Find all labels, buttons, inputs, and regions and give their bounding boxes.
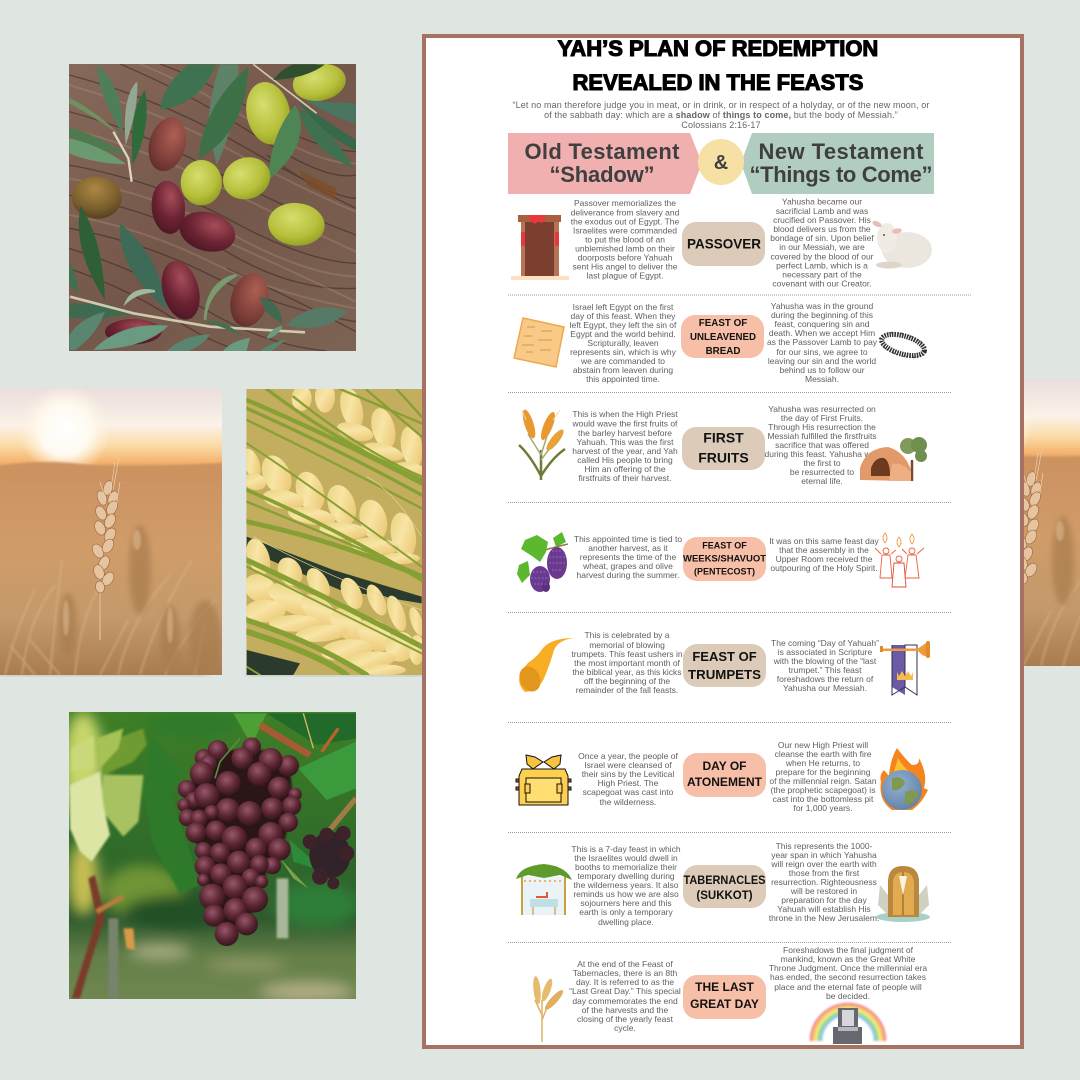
label: feast of trumpets bbox=[683, 644, 766, 687]
right text: Yahuah will establish His bbox=[777, 904, 871, 914]
left text: represents sin, which is why bbox=[570, 347, 677, 357]
right text: necessary part of the bbox=[782, 269, 862, 279]
divider lines bbox=[508, 295, 972, 942]
right text: leaving our sin and the world bbox=[768, 356, 876, 366]
label: the last great day: THE LAST bbox=[695, 980, 754, 994]
row: passover bbox=[511, 196, 932, 288]
left text: wheat, grapes and olive bbox=[582, 561, 673, 571]
icon: blood-marked door bbox=[511, 215, 569, 280]
row: the last great day bbox=[532, 945, 927, 1044]
label: day of atonement: DAY OF bbox=[702, 759, 747, 773]
row: day of atonement bbox=[516, 740, 928, 813]
right text: blood delivers us from the bbox=[773, 224, 871, 234]
right text: cast into the bottomless pit bbox=[773, 794, 874, 804]
label: tabernacles bbox=[683, 865, 766, 908]
left text: the Israelites would dwell in bbox=[574, 853, 678, 863]
label: the last great day bbox=[683, 975, 766, 1019]
left text: left Egypt, they left the sin of bbox=[570, 320, 677, 330]
right text: eternal life. bbox=[801, 476, 843, 486]
label: feast of unleavened bread: UNLEAVENED bbox=[690, 332, 756, 343]
left text: day. It is referred to as the bbox=[576, 977, 674, 987]
right text: Yahusha our Messiah. bbox=[783, 683, 867, 693]
left text: sojourners here and this bbox=[580, 898, 672, 908]
right text: cleanse the earth with fire bbox=[775, 749, 872, 759]
right text: outpouring of the Holy Spirit. bbox=[770, 563, 878, 573]
right text: prepare for the beginning bbox=[776, 767, 871, 777]
left text: to put the blood of an bbox=[585, 234, 665, 244]
right text: year span in which Yahusha bbox=[771, 850, 877, 860]
title: YAH’S PLAN OF REDEMPTION bbox=[558, 36, 878, 61]
scripture quote: “Let no man therefore judge you in meat, or in drink, or in respect of a holyday, or of the new moon, or bbox=[512, 100, 930, 110]
row: feast of unleavened bread bbox=[514, 301, 929, 384]
left text: Yahuah. This was the first bbox=[576, 437, 674, 447]
right text: feast, conquering sin and bbox=[775, 319, 870, 329]
icon: crown of thorns bbox=[877, 328, 929, 362]
label: feast of unleavened bread: BREAD bbox=[706, 346, 740, 357]
left text: remainder of the fall feasts. bbox=[576, 685, 678, 695]
left text: temporary dwelling during bbox=[577, 871, 675, 881]
icon: shofar bbox=[515, 638, 574, 695]
left text: earth is only a temporary bbox=[579, 907, 674, 917]
lower leaves bbox=[69, 206, 167, 350]
label: tabernacles: TABERNACLES bbox=[684, 875, 766, 887]
photo: wheat at sunset bbox=[0, 384, 222, 680]
right text: for 1,000 years. bbox=[793, 803, 853, 813]
right text: covered by the blood of our bbox=[770, 251, 874, 261]
banner: old and new testament bbox=[508, 133, 934, 194]
left text: This is when the High Priest bbox=[572, 409, 678, 419]
label: feast of weeks bbox=[683, 537, 767, 581]
top olives bbox=[292, 64, 346, 101]
banner: old testament shadow: Old Testament bbox=[524, 139, 680, 164]
banner: old testament shadow: “Shadow” bbox=[550, 162, 654, 187]
scripture quote: Colossians 2:16-17 bbox=[681, 120, 761, 130]
photo: grape cluster on vine bbox=[63, 712, 360, 1002]
title bbox=[558, 36, 878, 95]
icon: sukkah booth bbox=[516, 864, 572, 915]
label: first fruits: FRUITS bbox=[698, 450, 749, 466]
right text: during the beginning of this bbox=[771, 310, 873, 320]
right text: throne in the New Jerusalem. bbox=[769, 913, 879, 923]
icon: matzah bbox=[514, 318, 564, 367]
left text: dwelling place. bbox=[598, 917, 654, 927]
photo: wheat at sunset, right edge bbox=[823, 375, 1080, 671]
right text: behind us to follow our bbox=[779, 365, 865, 375]
label: the last great day: GREAT DAY bbox=[690, 997, 759, 1011]
left text: harvest of the year, and Yah bbox=[572, 446, 678, 456]
left text: the biblical year, as this kicks bbox=[572, 667, 682, 677]
banner: new testament things to come: New Testament bbox=[758, 139, 924, 164]
right text: the day of First Fruits. bbox=[781, 413, 863, 423]
label: feast of trumpets: TRUMPETS bbox=[688, 667, 761, 682]
left text: called His people to bring bbox=[577, 455, 673, 465]
left text: Tabernacles, there is an 8th bbox=[573, 968, 677, 978]
right text: those from the first bbox=[789, 868, 860, 878]
right text: It was on this same feast day bbox=[769, 536, 880, 546]
right text: during this feast. Yahusha was bbox=[765, 449, 879, 459]
left text: deliverance from slavery and bbox=[571, 207, 680, 217]
banner: old testament shadow bbox=[508, 133, 702, 194]
left text: trumpets. This feast ushers in bbox=[571, 649, 683, 659]
icon: disciples with flames bbox=[875, 533, 924, 587]
banner: new testament things to come: “Things to Come” bbox=[750, 162, 932, 187]
photo: golden barley close-up bbox=[239, 381, 428, 676]
right text: for our sins, we agree to bbox=[776, 347, 868, 357]
right text: perfect Lamb, which is a bbox=[776, 260, 868, 270]
left text: their sins by the Levitical bbox=[582, 769, 674, 779]
left text: the wilderness. bbox=[600, 797, 656, 807]
label: day of atonement: ATONEMENT bbox=[687, 775, 763, 789]
right text: Throne Judgment. Once the millennial era bbox=[769, 963, 927, 973]
left text: reminds us how we are also bbox=[573, 889, 679, 899]
left text: doorposts before Yahuah bbox=[578, 252, 673, 262]
left text: abstain from leaven during bbox=[573, 365, 673, 375]
label: feast of weeks: (PENTECOST) bbox=[694, 566, 755, 576]
left text: This appointed time is tied to bbox=[574, 534, 682, 544]
right text: Through His resurrection the bbox=[768, 422, 876, 432]
left text: “Last Great Day.” This special bbox=[569, 986, 681, 996]
right text: Our new High Priest will bbox=[778, 740, 868, 750]
right text: mankind, known as the Great White bbox=[781, 954, 916, 964]
right text: death. When we accept Him bbox=[769, 328, 875, 338]
left text: Israel left Egypt on the first bbox=[573, 302, 674, 312]
label: passover: PASSOVER bbox=[687, 236, 761, 252]
left text: the most important month of bbox=[574, 658, 681, 668]
left text: we are commanded to bbox=[580, 356, 665, 366]
label: feast of unleavened bread bbox=[681, 315, 764, 358]
right text: resurrection. Righteousness bbox=[771, 877, 877, 887]
icon: sheaf of wheat bbox=[532, 976, 565, 1042]
photo shadow: barley bbox=[248, 668, 423, 676]
right text: will be restored in bbox=[790, 886, 857, 896]
right text: will reign over the earth with bbox=[770, 859, 877, 869]
left text: harvest during the summer. bbox=[576, 570, 680, 580]
left text: the wilderness years. It also bbox=[574, 880, 679, 890]
right text: covenant with our Creator. bbox=[772, 278, 872, 288]
banner: new testament things to come bbox=[741, 133, 934, 194]
left text: Passover memorializes the bbox=[574, 198, 676, 208]
left text: Israelites were commanded bbox=[573, 225, 677, 235]
right text: has ended, the second resurrection takes bbox=[770, 972, 926, 982]
back grape cluster bbox=[303, 826, 354, 889]
right text: the first to bbox=[803, 458, 841, 468]
left text: High Priest. The bbox=[598, 778, 659, 788]
left text: off the beginning of the bbox=[584, 676, 670, 686]
ampersand badge bbox=[698, 139, 744, 185]
right text: The coming “Day of Yahuah” bbox=[771, 638, 879, 648]
left text: unblemished lamb on their bbox=[575, 243, 675, 253]
left text: another harvest, as it bbox=[588, 543, 668, 553]
left text: day of this feast. When they bbox=[571, 311, 676, 321]
right text: Yahusha was resurrected on bbox=[768, 404, 876, 414]
cluster shadow bbox=[188, 750, 293, 935]
right text: preparation for the day bbox=[781, 895, 868, 905]
right text: trumpet.” This feast bbox=[788, 665, 862, 675]
right text: Messiah. bbox=[805, 374, 839, 384]
left text: Him an offering of the bbox=[584, 464, 666, 474]
right text: crucified on Passover. His bbox=[773, 215, 871, 225]
scripture quote: of the sabbath day: which are a shadow of things to come, but the body of Messiah.” bbox=[544, 110, 898, 120]
left text: This is celebrated by a bbox=[584, 630, 670, 640]
left text: this appointed time. bbox=[586, 374, 660, 384]
left text: closing of the yearly feast bbox=[577, 1014, 674, 1024]
left text: day commemorates the end bbox=[572, 996, 678, 1006]
row: feast of trumpets bbox=[515, 630, 930, 695]
icon: empty tomb bbox=[860, 437, 927, 481]
right text: in our Messiah, we are bbox=[779, 242, 865, 252]
right text: Foreshadows the final judgment of bbox=[783, 945, 914, 955]
right text: (the prophetic scapegoat) is bbox=[771, 785, 875, 795]
right text: is associated in Scripture bbox=[778, 647, 873, 657]
left text: the barley harvest before bbox=[578, 428, 672, 438]
label: tabernacles: (SUKKOT) bbox=[696, 890, 753, 902]
icon: golden gate of new jerusalem bbox=[876, 866, 930, 922]
left text: Israel were cleansed of bbox=[584, 760, 672, 770]
left text: would wave the first fruits of bbox=[572, 419, 678, 429]
label: passover bbox=[682, 222, 765, 266]
row: tabernacles bbox=[516, 841, 930, 927]
icon: rainbow and white throne bbox=[811, 1004, 885, 1044]
left text: of the harvests and the bbox=[582, 1005, 669, 1015]
right text: be resurrected to bbox=[790, 467, 854, 477]
row: first fruits bbox=[519, 404, 927, 486]
ampersand badge: & bbox=[714, 152, 728, 174]
title: REVEALED IN THE FEASTS bbox=[573, 70, 863, 95]
label: first fruits bbox=[682, 427, 765, 470]
left text: Egypt and the world behind. bbox=[570, 329, 676, 339]
label: first fruits: FIRST bbox=[703, 430, 744, 446]
right text: This represents the 1000- bbox=[776, 841, 873, 851]
photo shadow: wheat at sunset bbox=[0, 668, 208, 676]
right text: bondage of sin. Upon belief bbox=[770, 233, 874, 243]
right text: be decided. bbox=[826, 991, 870, 1001]
photo: olives and leaves on wood bbox=[69, 60, 356, 351]
label: feast of unleavened bread: FEAST OF bbox=[699, 318, 747, 329]
right text: when He returns, to bbox=[785, 758, 860, 768]
left text: memorial of blowing bbox=[589, 640, 665, 650]
right text: Messiah fulfilled the firstfruits bbox=[767, 431, 877, 441]
left text: booths to memorialize their bbox=[575, 862, 677, 872]
right text: with the blowing of the “last bbox=[773, 656, 877, 666]
grapes bbox=[177, 737, 302, 946]
left text: At the end of the Feast of bbox=[577, 959, 673, 969]
left text: Scripturally, leaven bbox=[587, 338, 659, 348]
right text: that the assembly in the bbox=[779, 545, 869, 555]
back leaves bbox=[69, 64, 356, 182]
left text: represents the time of the bbox=[580, 552, 676, 562]
label: feast of weeks: FEAST OF bbox=[702, 540, 747, 550]
left text: cycle. bbox=[614, 1023, 636, 1033]
left text: the exodus out of Egypt. The bbox=[571, 216, 680, 226]
right text: as the Passover Lamb to pay bbox=[767, 337, 878, 347]
label: feast of weeks: WEEKS/SHAVUOT bbox=[683, 554, 767, 564]
left text: scapegoat was cast into bbox=[583, 787, 674, 797]
right text: sacrifice that was offered bbox=[775, 440, 869, 450]
right text: of the millennial reign. Satan bbox=[769, 776, 877, 786]
right text: Yahusha became our bbox=[782, 196, 862, 206]
left text: Once a year, the people of bbox=[578, 751, 678, 761]
panel: feast chart bbox=[424, 36, 1022, 1047]
icon: earth on fire bbox=[880, 748, 928, 810]
icon: lamb bbox=[871, 220, 932, 268]
right text: foreshadows the return of bbox=[777, 674, 874, 684]
icon: trumpet with banner bbox=[880, 641, 930, 695]
left text: This is a 7-day feast in which bbox=[571, 844, 681, 854]
right text: Upper Room received the bbox=[776, 554, 873, 564]
left text: firstfruits of their harvest. bbox=[578, 473, 672, 483]
icon: grape vine bbox=[517, 532, 568, 592]
right text: Yahusha was in the ground bbox=[771, 301, 873, 311]
label: day of atonement bbox=[683, 753, 766, 797]
right text: sacrificial Lamb and was bbox=[776, 206, 868, 216]
left text: last plague of Egypt. bbox=[586, 270, 664, 280]
row: feast of weeks bbox=[517, 532, 924, 592]
right text: place and the eternal fate of people will bbox=[774, 982, 922, 992]
icon: wheat stalks bbox=[519, 408, 566, 480]
label: feast of trumpets: FEAST OF bbox=[692, 649, 757, 664]
left text: sent His angel to deliver the bbox=[573, 261, 678, 271]
icon: ark of the covenant bbox=[516, 755, 571, 805]
